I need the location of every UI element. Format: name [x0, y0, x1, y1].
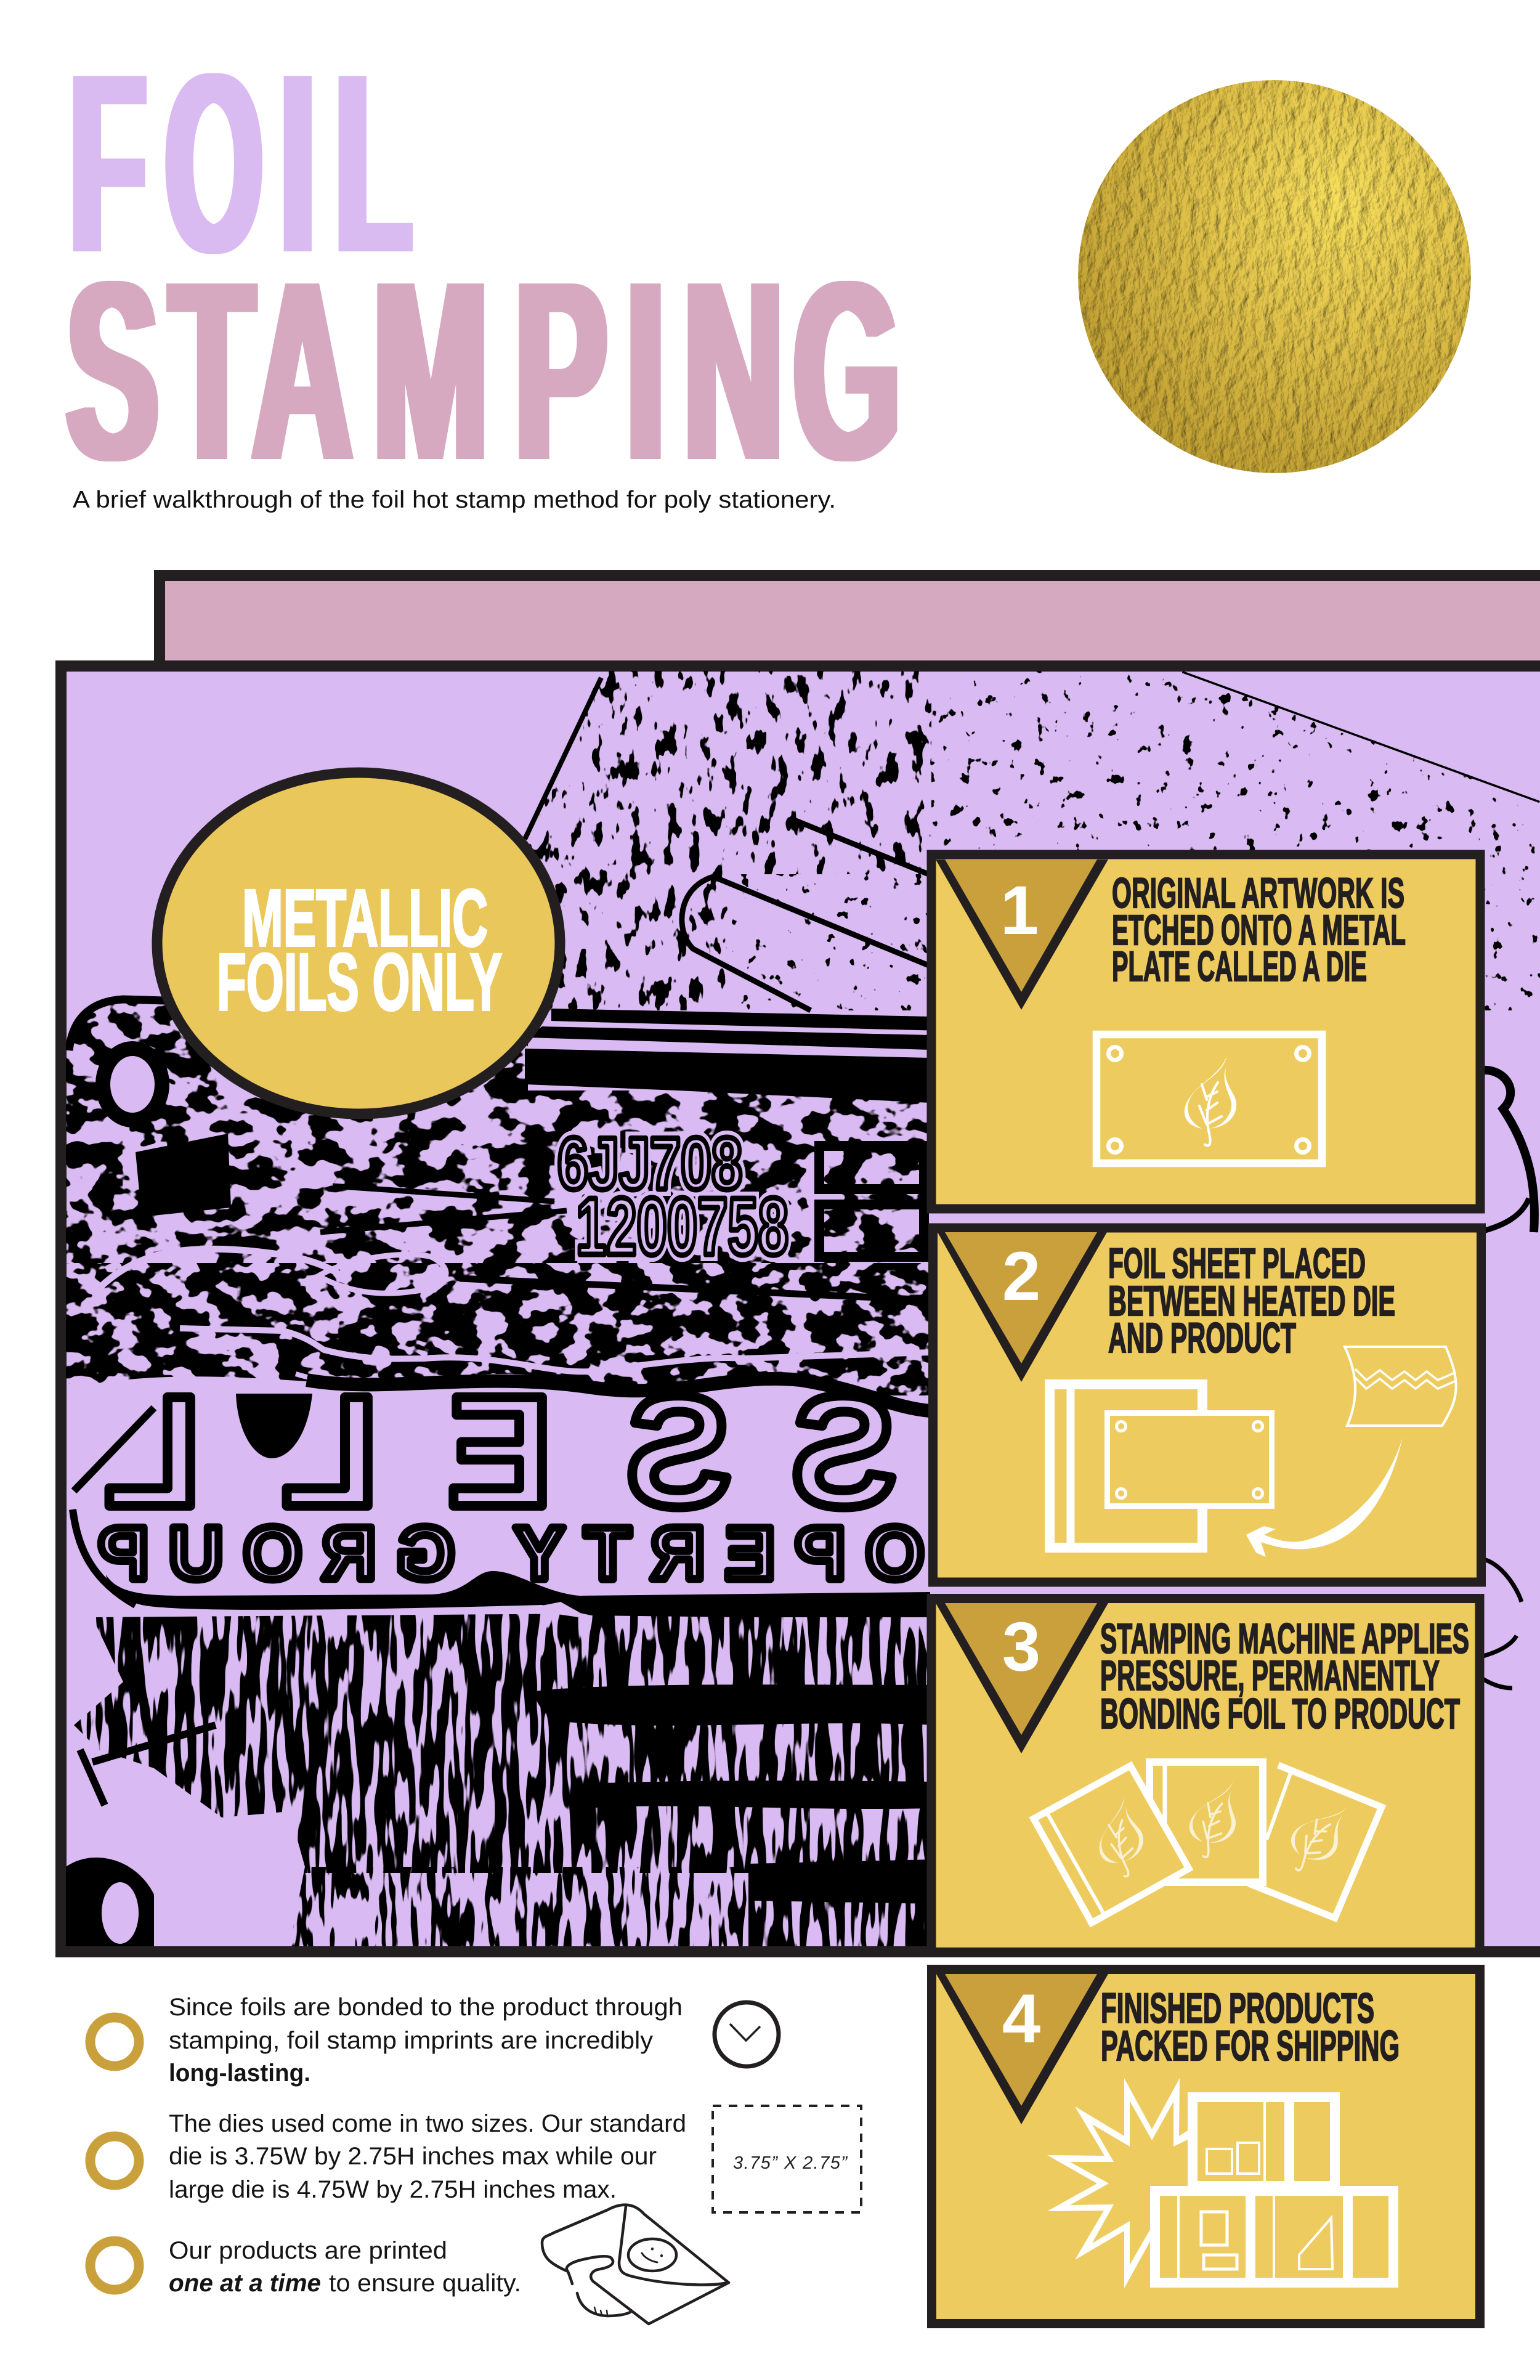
- step 4 text: [1101, 1984, 1400, 2069]
- note 1: long-lasting: stamping, foil stamp imprints are incredibly: [169, 2027, 653, 2054]
- note 1: long-lasting: [90, 1994, 683, 2087]
- panel: step 3: [931, 1598, 1480, 1952]
- note 2: die sizes: die is 3.75W by 2.75H inches max while our: [169, 2143, 657, 2170]
- note 3: one at a time: Our products are printed: [169, 2237, 447, 2264]
- engraving ribbon above lettering: [307, 1379, 930, 1411]
- ring bullet: [90, 2017, 139, 2066]
- note 1: long-lasting: long-lasting.: [169, 2060, 310, 2087]
- dashed die-size box: [713, 2106, 861, 2212]
- step 2 text: AND PRODUCT: [1108, 1314, 1296, 1362]
- badge: number 1: 1: [1000, 872, 1039, 949]
- callout: metallic foils only: FOILS ONLY: [217, 936, 502, 1027]
- lilac lettering field: [79, 1376, 818, 1395]
- note 2: die sizes: [90, 2110, 686, 2203]
- leaf swirl ribbons: [100, 1246, 928, 1380]
- icon: hand holding envelope: [542, 2205, 729, 2324]
- icon: clock: [715, 2002, 779, 2066]
- badge: number 3: 3: [1002, 1608, 1040, 1685]
- icon: stacked shipping boxes: [1155, 2097, 1393, 2283]
- plate serial numbers: 1200758: [576, 1181, 788, 1272]
- dashed die-size box: 3.75” X 2.75”: [733, 2153, 848, 2173]
- title: [67, 22, 901, 513]
- mirrored lettering S S E L L: L: [282, 1363, 378, 1540]
- plate serial numbers: 1200758: [576, 1181, 788, 1272]
- title: FOIL: [70, 22, 411, 306]
- plate serial numbers: [557, 1123, 924, 1272]
- step 4 text: FINISHED PRODUCTS: [1101, 1984, 1374, 2032]
- mirrored lettering S S E L L: S: [791, 1363, 896, 1540]
- step 2 text: FOIL SHEET PLACED: [1108, 1240, 1366, 1287]
- mirrored lettering PROPERTY GROUP: OPERTY GROUP: [99, 1511, 924, 1595]
- icon: starburst: [1047, 2078, 1189, 2288]
- badge: number 2: [938, 1232, 1107, 1382]
- callout: metallic foils only: [157, 773, 560, 1114]
- mirrored lettering S S E L L: [105, 1392, 897, 1512]
- lower-left blob: [66, 1858, 154, 1946]
- badge: number 1: [936, 859, 1108, 1010]
- badge: number 3: [936, 1603, 1108, 1753]
- lilac main panel with engraved stamp plate: [61, 666, 1540, 1952]
- engraving ribbon below lettering: [106, 1571, 930, 1617]
- title: STAMPING: [67, 228, 901, 513]
- step 3 text: [1100, 1615, 1469, 1737]
- badge: number 4: 4: [1002, 1980, 1040, 2057]
- badge: number 2: 2: [1002, 1238, 1040, 1315]
- icon: three foil-stamped cards: [1034, 1762, 1382, 1923]
- subtitle: A brief walkthrough of the foil hot stamp method for poly stationery.: [73, 487, 836, 513]
- mirrored lettering S S E L L: E: [447, 1363, 553, 1540]
- ring bullet: [90, 2137, 139, 2185]
- panel: step 1: [931, 855, 1480, 1209]
- callout: metallic foils only: METALLIC: [242, 872, 488, 963]
- mirrored lettering S S E L L: L: [105, 1363, 201, 1540]
- plate serial numbers: 6JJ708: [557, 1123, 742, 1205]
- engraved plate texture: [66, 671, 1540, 1946]
- step 2 text: [1108, 1240, 1395, 1362]
- arrow: [1246, 1437, 1403, 1557]
- panel: step 2: [933, 1228, 1481, 1582]
- panel: step 4: [931, 1969, 1480, 2324]
- ring bullet: [90, 2241, 139, 2289]
- icon: product and die: [1050, 1384, 1271, 1548]
- note 3: one at a time: [90, 2237, 521, 2297]
- pink back panel: [160, 575, 1540, 674]
- badge: number 4: [936, 1974, 1108, 2124]
- plate serial numbers: 6JJ708: [557, 1123, 742, 1205]
- note 1: long-lasting: Since foils are bonded to the product through: [169, 1994, 683, 2021]
- icon: die plate with leaf: [1096, 1034, 1322, 1163]
- note 2: die sizes: The dies used come in two sizes. Our standard: [169, 2110, 686, 2137]
- gold foil circle: [1078, 80, 1471, 473]
- step 1 text: [1112, 869, 1406, 990]
- mirrored lettering S S E L L: S: [626, 1363, 731, 1540]
- right-margin flourishes: [1478, 1070, 1534, 1688]
- note 3: one at a time: to ensure quality.: [329, 2270, 521, 2297]
- note 2: die sizes: large die is 4.75W by 2.75H inches max.: [169, 2176, 617, 2203]
- note 3: one at a time: one at a time: [169, 2270, 321, 2297]
- icon: foil sheet: [1345, 1347, 1456, 1426]
- plate outline and rails: [69, 999, 185, 1050]
